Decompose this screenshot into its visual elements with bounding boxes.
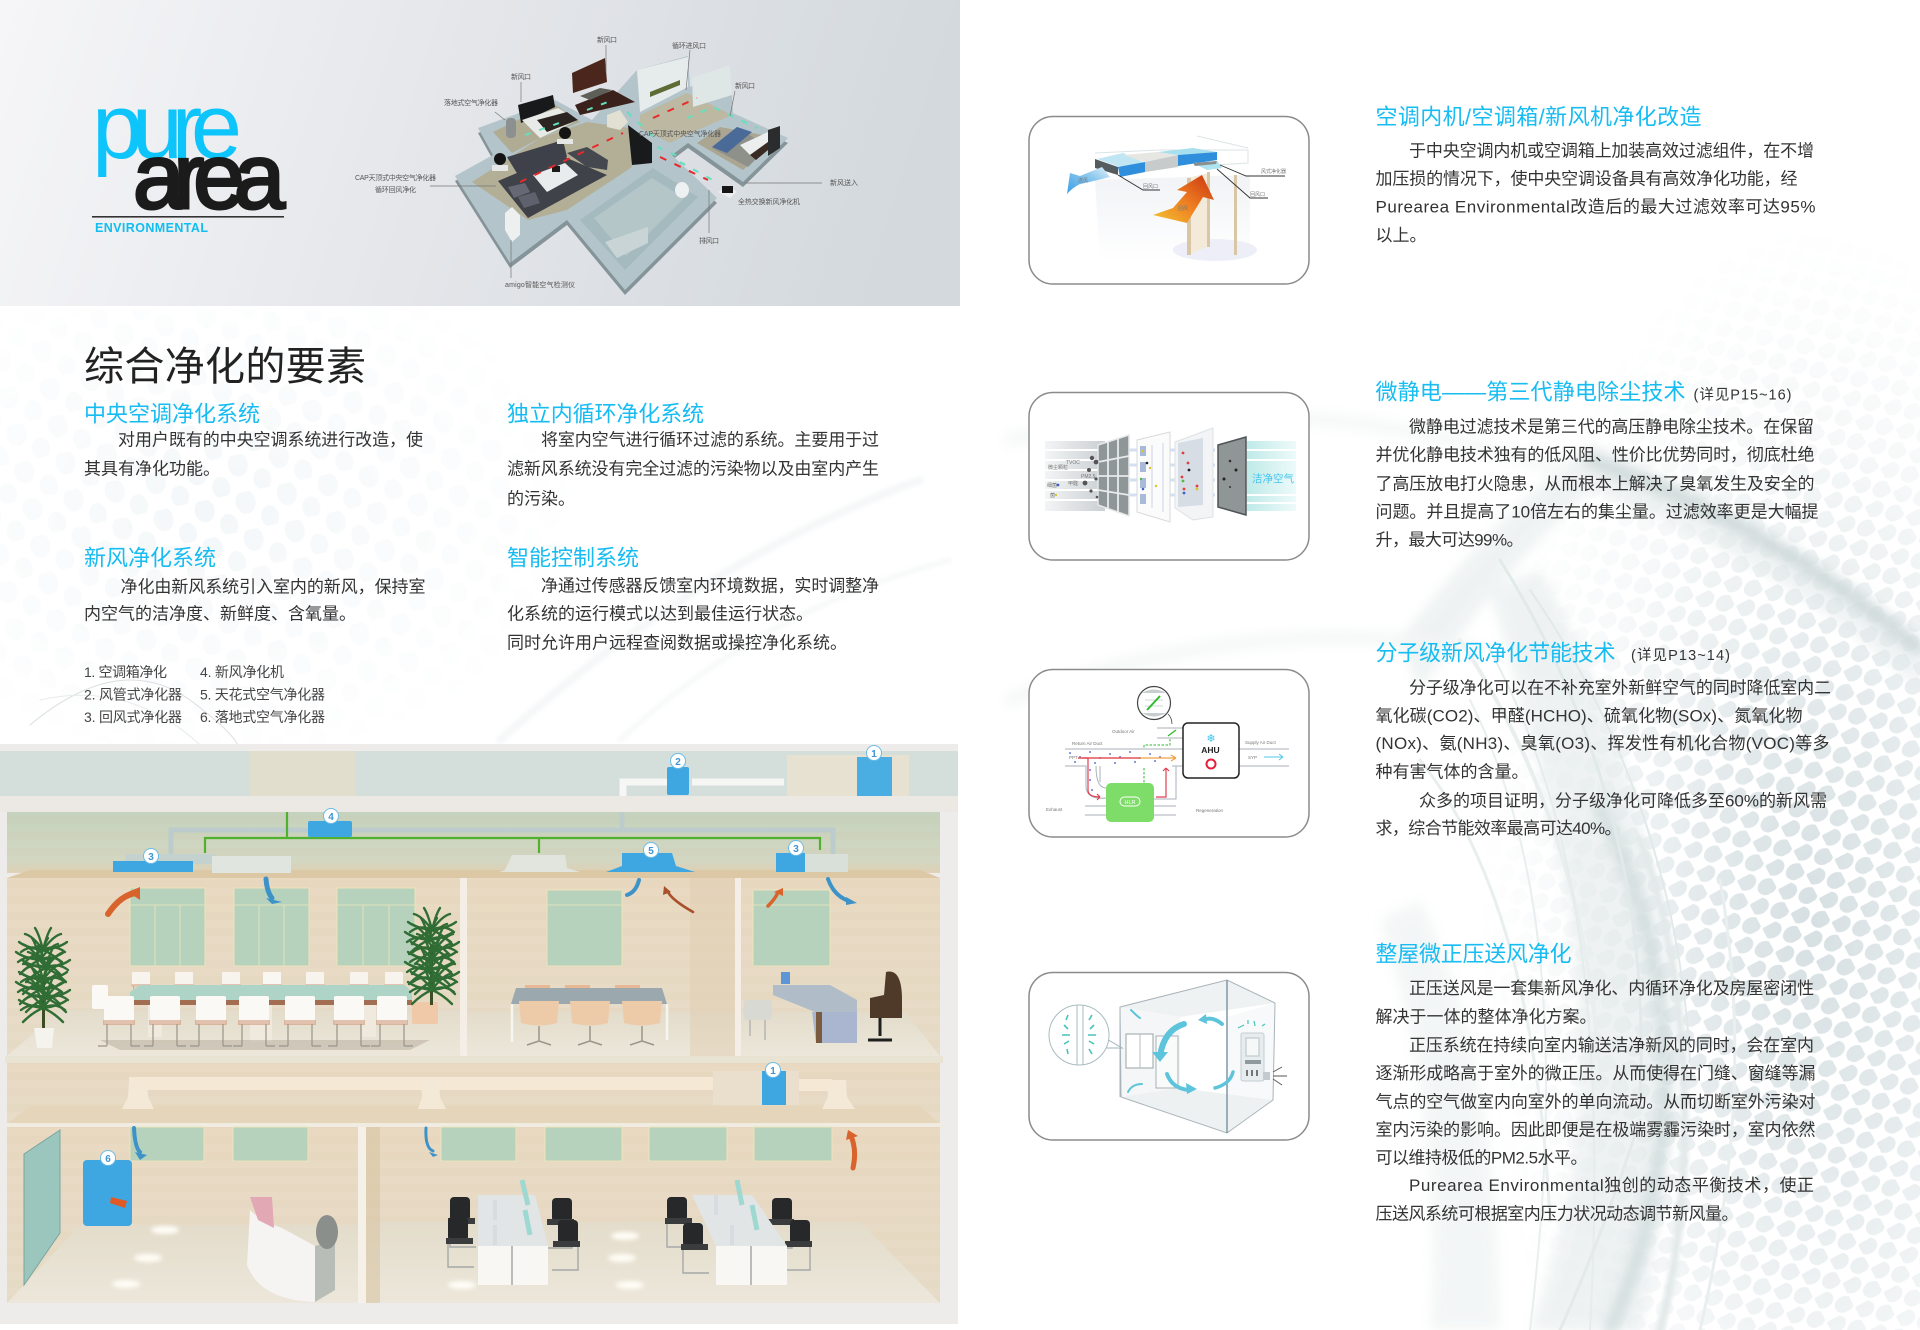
TV wall and brown cabinet [572,58,607,93]
floor plan labels: CAP天顶式中央空气净化器 [639,129,721,138]
section: AC retrofit text [1376,104,1816,245]
floor plan labels: 全热交换新风净化机 [738,197,800,206]
schematic labels: SYP [1248,755,1257,760]
section: positive pressure text: 逐渐形成略高于室外的微正压。从而使得在门缝、窗缝等漏 [1376,1063,1816,1083]
floor lights [112,1226,644,1289]
conference table [92,972,438,1050]
floor plan labels: 新风口 [735,81,755,90]
section: independent recirculation: 将室内空气进行循环过滤的系统。主要用于过 [541,430,879,450]
workstations [446,1180,812,1285]
card: molecular purification AHU schematic [1029,670,1309,837]
section: micro electrostatic text: 并优化静电技术独有的低风阻、性价比优势同时，彻底杜绝 [1376,446,1814,464]
section: positive pressure text: 可以维持极低的PM2.5水平。 [1376,1148,1588,1168]
numbered markers: 2 [675,757,681,768]
bookcase [628,125,652,165]
section: positive pressure text: 正压系统在持续向室内输送洁净新风的同时，会在室内 [1409,1036,1814,1055]
section: micro electrostatic text [1376,379,1818,550]
cyan air path [525,100,757,183]
floor plan labels: 循环进风口 [672,41,706,50]
amigo box [505,207,520,242]
callout labels: 回风口 [1250,192,1265,198]
callout lines [1118,165,1285,198]
section: independent recirculation: 的污染。 [507,490,575,508]
red air path [520,98,708,182]
bedroom left [518,95,555,123]
unit 5 [606,853,695,872]
section: molecular purification text: 众多的项目证明，分子级净化可降低多至60%的新风需 [1419,792,1827,810]
section: micro electrostatic text: 升，最大可达99%。 [1376,530,1524,550]
section: molecular purification text: 分子级净化可以在不补充室外新鲜空气的同时降低室内二 [1409,678,1831,698]
circulating air arrows [1128,1010,1233,1094]
section: molecular purification text: 种有害气体的含量。 [1376,762,1528,782]
floor plan labels: CAP天顶式中央空气净化器 [355,173,436,182]
floor plan labels: 循环回风净化 [375,185,416,194]
floors [493,103,580,153]
AHU box: ❄ [1206,733,1216,745]
section: positive pressure text: 整屋微正压送风净化 [1376,941,1572,966]
upper plenum with ducts [7,812,940,878]
callout labels [1078,168,1286,212]
background: grey flowing swirl bands [30,416,1920,1330]
floor plan labels: 排风口 [699,236,719,245]
HLR module: HLR [1124,800,1136,806]
numbered markers: 5 [648,846,654,857]
slab under upper rooms [0,796,958,812]
schematic labels: Return Air Duct [1072,741,1103,746]
section: micro electrostatic text: 了高压放电打火隐患，从而根本上解决了臭氧发生及安全的 [1376,474,1814,494]
orange return arrow [1153,175,1214,223]
section: central AC purification: 其具有净化功能。 [84,460,220,478]
dust dots [1070,752,1160,790]
particles and labels [1047,456,1098,499]
logo: purearea environmental: pure [92,76,242,178]
lamps [492,127,573,171]
glass door [24,1130,60,1285]
unit 3 left [113,861,193,872]
floor plan labels: 落地式空气净化器 [444,98,498,107]
section: molecular purification text [1376,640,1831,838]
background: halftone dot field on the right [1603,422,1920,1330]
schematic labels: Outdoor Air [1112,729,1135,734]
floor standing purifier unit 6 [83,1160,132,1226]
section: micro electrostatic text: 微静电——第三代静电除尘技术 [1376,379,1686,404]
schematic labels [1046,729,1277,813]
fresh-air unit [718,186,737,198]
pale room behind [1095,175,1250,262]
numbered unit list: 6. 落地式空气净化器 [200,709,325,725]
section: positive pressure text: 室内污染的影响。因此即便是在极端雾霾污染时，室内依然 [1376,1120,1816,1140]
section: molecular purification text: (NOx)、氨(NH3)、臭氧(O3)、挥发性有机化合物(VOC)等多 [1376,734,1830,753]
damper magnifier [1138,686,1176,736]
lower airflow arrows [134,1128,858,1168]
section: central AC purification [84,401,423,478]
section: smart control: 化系统的运行模式以达到最佳运行状态。 [507,604,813,624]
logo: purearea environmental: area [133,126,286,228]
section: micro electrostatic text: 微静电过滤技术是第三代的高压静电除尘技术。在保留 [1409,418,1814,436]
section: smart control: 同时允许用户远程查阅数据或操控净化系统。 [507,634,847,652]
upper airflow arrows [108,879,857,914]
meeting table room two [511,985,667,1045]
lower floor rooms [7,1127,940,1303]
particles and labels: 甲醛 [1068,480,1078,487]
numbered unit list: 2. 风管式净化器 [84,686,182,702]
living room rug and sofa [498,155,607,218]
numbered markers [100,746,882,1166]
wall purifier [1238,1020,1287,1085]
numbered markers: 1 [871,749,877,760]
bathroom [580,168,698,270]
white closets [637,57,688,112]
section: AC retrofit text: 以上。 [1376,226,1426,245]
clean air label: 洁净空气 [1252,472,1294,485]
logo: purearea environmental: ENVIRONMENTAL [95,221,208,235]
card: electrostatic filter layers [1029,392,1309,560]
section: AC retrofit text: Purearea Environmental改造后的最大过滤效率可达95% [1376,198,1816,216]
room box [1120,980,1275,1133]
floor plan labels: 新风送入 [830,178,858,187]
unit 2 on roof [667,767,689,795]
section: positive pressure text: 正压送风是一套集新风净化、内循环净化及房屋密闭性 [1409,979,1814,998]
floor plan labels: 新风口 [511,72,531,81]
unit 4 [308,821,352,837]
unit 1 mid level [762,1071,786,1105]
section: smart control: 净通过传感器反馈室内环境数据，实时调整净 [541,576,879,596]
air flow arrows [1078,755,1176,761]
section: independent recirculation [507,401,879,508]
armchair [607,110,628,130]
numbered markers: 1 [770,1066,776,1077]
section: molecular purification text: 分子级新风净化节能技术 [1376,640,1616,665]
callout labels: 回风 [1178,206,1188,212]
title: 综合净化的要素 [84,345,366,389]
unit 3 right [776,853,805,872]
schematic labels: PPT [1069,755,1078,760]
particles and labels: TVOC [1066,460,1080,466]
numbered unit list: 1. 空调箱净化 [84,664,167,680]
schematic labels: Supply Air Duct [1245,740,1277,745]
callout labels: 风式净化器 [1261,168,1286,175]
numbered unit list [84,664,325,725]
potted plant right [405,908,459,1005]
HLR module [1106,783,1154,822]
numbered markers: 6 [105,1154,111,1165]
section: AC retrofit text: 于中央空调内机或空调箱上加装高效过滤组件，在不增 [1409,142,1814,160]
schematic labels: Regeneration [1196,808,1224,813]
background: pale dot field on the left [110,436,324,584]
particles and labels: 菌 [1050,492,1055,499]
section: fresh air purification: 净化由新风系统引入室内的新风，保持室 [120,578,426,596]
section: independent recirculation: 滤新风系统没有完全过滤的污染物以及由室内产生 [507,460,879,478]
section: molecular purification text: 氧化碳(CO2)、甲醛(HCHO)、硫氧化物(SOx)、氮氧化物 [1376,706,1802,726]
section: positive pressure text: 气点的空气做室内向室外的单向流动。从而切断室外污染对 [1376,1092,1816,1112]
section: AC retrofit text: 空调内机/空调箱/新风机净化改造 [1376,104,1702,129]
floor plan labels: 新风口 [597,35,617,44]
air stripes between layers [1128,450,1215,495]
section: fresh air purification: 新风净化系统 [84,545,216,570]
section: positive pressure text [1376,941,1816,1224]
service plenum with duct [7,1063,940,1125]
numbered unit list: 4. 新风净化机 [200,664,284,680]
callout labels: 送风 [1078,177,1088,184]
office desk room three [744,972,902,1043]
incoming air stripes [1045,441,1105,511]
blue supply arrow [1067,167,1110,194]
unit 1 on roof [857,757,892,797]
callout labels: 回风口 [1143,184,1158,190]
clean air stripes [1247,441,1296,511]
numbered markers: 3 [793,844,799,855]
section: central AC purification: 中央空调净化系统 [84,401,260,426]
section: molecular purification text: 求，综合节能效率最高可达40%。 [1376,819,1622,838]
section: positive pressure text: 压送风系统可根据室内压力状况动态调节新风量。 [1376,1204,1738,1224]
magnifier callout [1049,1005,1122,1065]
upper floor rooms [7,878,940,1056]
card: positive pressure room diagram [1029,972,1309,1140]
section: smart control: 智能控制系统 [507,545,639,570]
logo: purearea environmental [92,76,286,235]
section: AC retrofit text: 加压损的情况下，使中央空调设备具有高效净化功能，经 [1376,168,1798,188]
schematic labels: Exhaust [1046,807,1063,812]
duct unit [1095,148,1222,177]
right bedroom [712,127,768,167]
floor plan labels: amigo智能空气检测仪 [505,280,575,289]
particles and labels: 细菌 [1047,482,1057,489]
filter layer 4 carbon [1218,437,1246,515]
section: micro electrostatic text: 问题。并且提高了10倍左右的集尘量。过滤效率更是大幅提 [1376,502,1818,522]
section: micro electrostatic text: (详见P15~16) [1694,386,1792,404]
section: positive pressure text: Purearea Environmental独创的动态平衡技术，使正 [1409,1175,1814,1195]
numbered markers: 3 [148,852,154,863]
top banner panel [0,0,960,306]
3D floor plan illustration [355,35,858,295]
numbered markers: 4 [328,812,334,823]
building cutaway illustration [0,744,958,1324]
particles and labels: PM2.5 [1081,474,1096,480]
section: independent recirculation: 独立内循环净化系统 [507,401,704,426]
floor slab [5,1056,943,1063]
numbered unit list: 5. 天花式空气净化器 [200,686,325,702]
potted plant left [16,928,70,1048]
AHU box: AHU [1201,745,1220,755]
leader lines [430,45,822,278]
filter layer 2 [1137,432,1170,522]
filter layer 3 [1175,428,1213,520]
section: central AC purification: 对用户既有的中央空调系统进行改造，使 [118,430,423,450]
card: duct retrofit diagram [1029,116,1309,284]
section: positive pressure text: 解决于一体的整体净化方案。 [1376,1008,1596,1026]
reception desk [247,1197,338,1302]
numbered unit list: 3. 回风式净化器 [84,709,182,725]
floor plan labels [355,35,858,289]
toilet and bench [675,182,689,198]
particles and labels: 微尘颗粒 [1048,464,1068,471]
section: smart control [507,545,879,652]
section: fresh air purification: 内空气的洁净度、新鲜度、含氧量。 [84,604,356,624]
filter layer 1 [1098,435,1129,516]
door [1187,172,1237,255]
roof level with units [0,751,958,797]
section: fresh air purification [84,545,426,624]
section: molecular purification text: (详见P13~14) [1631,647,1730,664]
ducts [1065,728,1289,815]
AHU box [1183,723,1239,778]
